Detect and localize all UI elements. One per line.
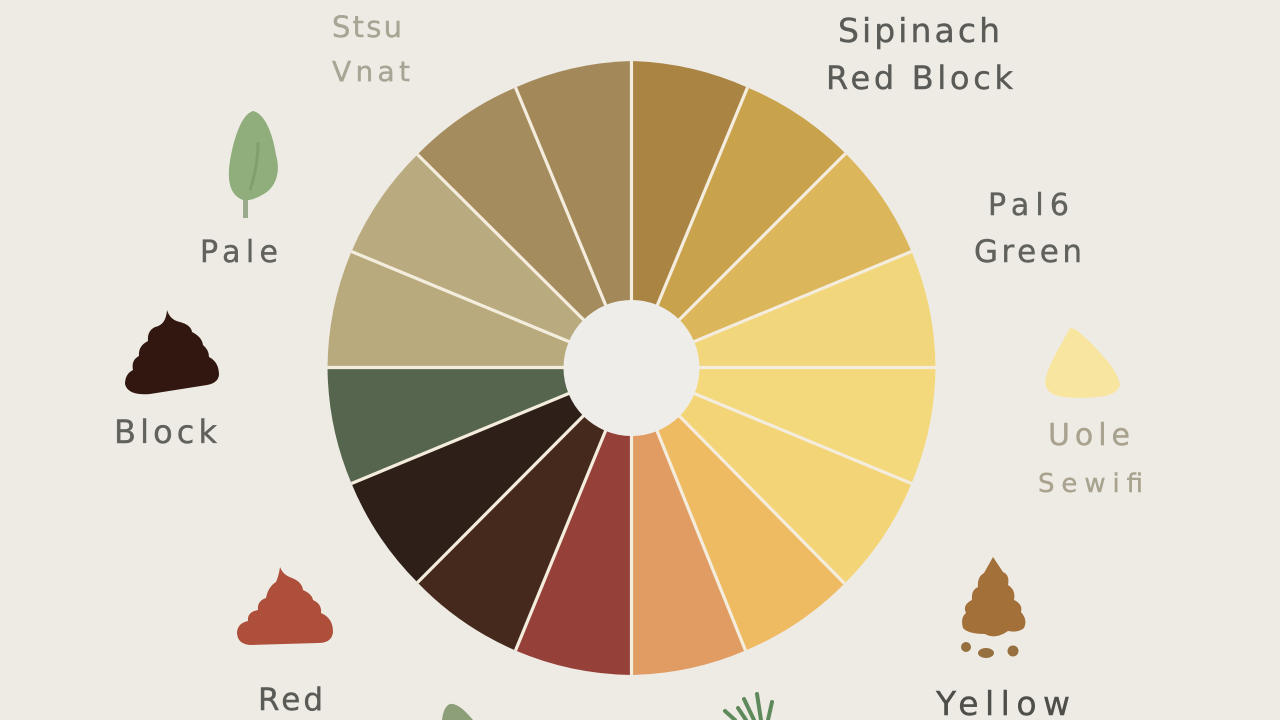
wheel centre hole — [564, 300, 700, 436]
icon: black stool — [125, 310, 219, 394]
label: Vole Sewifi: Uole — [1048, 418, 1130, 453]
colour wheel chart — [328, 61, 936, 675]
label: Pale Green — [974, 188, 1082, 270]
icon: grass tuft — [725, 694, 772, 720]
label: Red: Red — [258, 682, 323, 718]
label: Pale Green: Pal6 — [988, 188, 1069, 223]
label: Spinach Red Black — [826, 11, 1013, 97]
label: Pale Green: Green — [974, 234, 1082, 270]
label: Vole Sewifi: Sewifi — [1038, 469, 1143, 499]
label: Stsu Vnat: Vnat — [332, 55, 410, 88]
wheel sectors — [328, 61, 936, 675]
label: Black: Block — [114, 413, 217, 451]
icon: red stool — [237, 567, 333, 645]
label: Spinach Red Black: Red Block — [826, 59, 1013, 97]
icon: bottom leaf — [442, 704, 473, 720]
icon: green leaf — [229, 111, 278, 218]
label: Pale: Pale — [200, 235, 278, 270]
label: Stsu Vnat: Stsu — [332, 10, 402, 44]
label: Spinach Red Black: Sipinach — [838, 11, 1000, 50]
label: Vole Sewifi — [1038, 418, 1143, 499]
label: Stsu Vnat — [332, 10, 410, 88]
icon: yellow stool — [1045, 328, 1120, 398]
icon: brown stool with droplets — [961, 557, 1025, 658]
